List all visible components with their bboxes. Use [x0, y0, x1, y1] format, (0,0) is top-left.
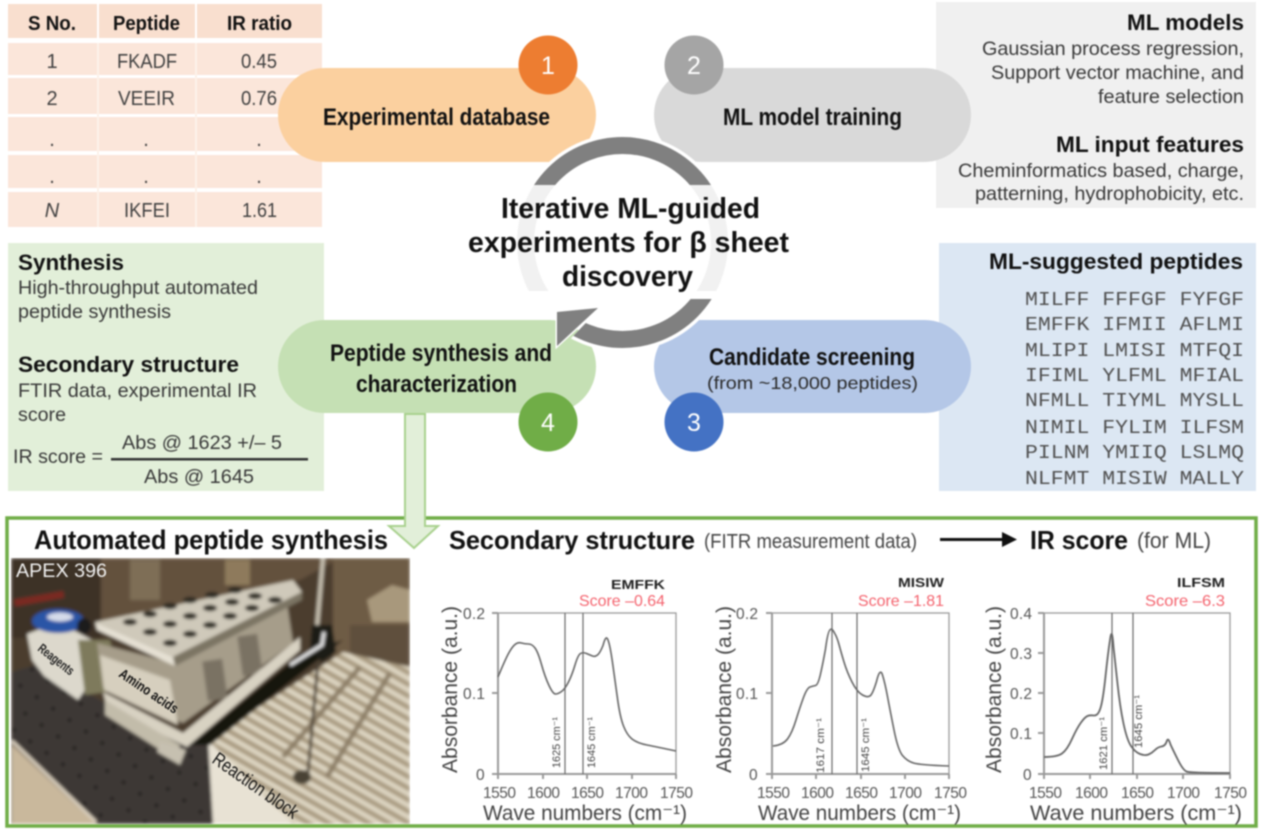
chart: ILFSM FTIR spectrum: Score –6.3 — [1145, 593, 1225, 610]
panel: ML models and input features: feature selection — [1098, 86, 1244, 108]
chart: EMFFK FTIR spectrum: Wave numbers (cm⁻¹) — [483, 802, 687, 825]
panel: experimental database table — [8, 4, 322, 227]
panel: ML models and input features: Cheminformatics based, charge, — [958, 160, 1244, 182]
arrow: down arrow into results frame — [389, 414, 438, 548]
title: central cycle heading: experiments for β sheet — [468, 227, 789, 259]
panel: experimental database table: 2 — [46, 88, 58, 110]
panel: ML-suggested peptides — [939, 243, 1256, 491]
panel: synthesis and secondary structure: Secondary structure — [18, 352, 239, 377]
panel: ML-suggested peptides: MILFF FFFGF FYFGF — [1025, 289, 1244, 311]
chart: EMFFK FTIR spectrum: 1650 — [571, 785, 604, 802]
pill: candidate screening — [654, 320, 971, 413]
panel: ML-suggested peptides: IFIML YLFML MFIAL — [1025, 365, 1244, 387]
chart: EMFFK FTIR spectrum: 0.2 — [463, 606, 485, 623]
panel: synthesis and secondary structure — [8, 243, 324, 491]
chart: ILFSM FTIR spectrum: 0.2 — [1010, 686, 1032, 703]
chart: ILFSM FTIR spectrum: Wave numbers (cm⁻¹) — [1030, 802, 1242, 825]
panel: experimental database table: 0.45 — [241, 51, 277, 73]
panel: experimental database table: S No. — [28, 13, 76, 35]
panel: synthesis and secondary structure: IR score = — [13, 446, 103, 468]
panel: synthesis and secondary structure: peptide synthesis — [18, 301, 171, 323]
chart: MISIW FTIR spectrum: 0.2 — [736, 606, 758, 623]
icon: step 1 badge — [518, 36, 578, 94]
chart: MISIW FTIR spectrum: Score –1.81 — [858, 593, 944, 610]
chart: MISIW FTIR spectrum: 0.1 — [736, 686, 758, 703]
pill: peptide synthesis and characterization: Peptide synthesis and — [330, 340, 552, 367]
photo: APEX 396 synthesizer: APEX 396 — [16, 561, 107, 582]
panel: ML-suggested peptides: NLFMT MISIW MALLY — [1025, 468, 1245, 490]
chart: EMFFK FTIR spectrum: 1625 cm⁻¹ — [551, 717, 563, 768]
chart: MISIW FTIR spectrum: 1617 cm⁻¹ — [815, 718, 827, 773]
chart: ILFSM FTIR spectrum: 1750 — [1214, 785, 1247, 802]
icon: step 2 badge — [664, 36, 724, 94]
heading: automated peptide synthesis: Automated peptide synthesis — [34, 525, 388, 555]
chart: ILFSM FTIR spectrum: 0.4 — [1010, 606, 1032, 623]
panel: experimental database table: 1.61 — [242, 200, 277, 222]
panel: experimental database table: . — [256, 166, 262, 188]
panel: ML models and input features: Gaussian process regression, — [982, 38, 1244, 60]
pill: experimental database — [278, 68, 596, 162]
arrow: to IR score — [940, 532, 1017, 547]
icon: step 3 badge: 3 — [687, 409, 701, 437]
chart: ILFSM FTIR spectrum: 1621 cm⁻¹ — [1098, 717, 1110, 770]
panel: experimental database table: . — [143, 166, 149, 188]
chart: EMFFK FTIR spectrum: 1750 — [660, 785, 693, 802]
chart: EMFFK FTIR spectrum — [439, 577, 693, 825]
panel: ML-suggested peptides: EMFFK IFMII AFLMI — [1025, 314, 1244, 336]
title: central cycle heading: Iterative ML-guided — [501, 193, 760, 225]
icon: step 3 badge — [664, 392, 724, 452]
chart: MISIW FTIR spectrum: 1550 — [757, 785, 790, 802]
chart: MISIW FTIR spectrum: Wave numbers (cm⁻¹) — [758, 802, 961, 825]
chart: ILFSM FTIR spectrum: 1645 cm⁻¹ — [1133, 695, 1145, 748]
panel: experimental database table: 1 — [46, 51, 58, 73]
panel: experimental database table: . — [49, 129, 55, 151]
chart: EMFFK FTIR spectrum: Absorbance (a.u.) — [439, 606, 462, 773]
panel: experimental database table: FKADF — [117, 51, 177, 73]
chart: ILFSM FTIR spectrum: ILFSM — [1177, 575, 1225, 590]
chart: ILFSM FTIR spectrum: 1700 — [1167, 785, 1200, 802]
chart: EMFFK FTIR spectrum: 0 — [476, 767, 485, 784]
panel: experimental database table: N — [45, 200, 60, 222]
pill: peptide synthesis and characterization — [278, 320, 596, 413]
panel: experimental database table: IR ratio — [227, 13, 292, 35]
panel: synthesis and secondary structure: Abs @ 1645 — [144, 466, 254, 488]
panel: ML models and input features: patterning, hydrophobicity, etc. — [975, 183, 1244, 205]
panel: ML-suggested peptides: NIMIL FYLIM ILFSM — [1025, 417, 1244, 439]
pill: candidate screening: Candidate screening — [709, 344, 915, 371]
chart: EMFFK FTIR spectrum: 1700 — [615, 785, 648, 802]
chart: ILFSM FTIR spectrum: 1550 — [1029, 785, 1062, 802]
icon: step 4 badge: 4 — [541, 409, 555, 437]
photo: APEX 396 synthesizer: Amino acids — [116, 665, 182, 717]
panel: synthesis and secondary structure: Synthesis — [18, 250, 124, 275]
panel: experimental database table: Peptide — [113, 13, 180, 35]
chart: ILFSM FTIR spectrum: 0 — [1023, 767, 1032, 784]
heading: secondary structure: Secondary structure — [449, 525, 695, 555]
heading: secondary structure: (FITR measurement data) — [704, 531, 917, 553]
pill: candidate screening: (from ~18,000 peptides) — [707, 373, 918, 393]
chart: ILFSM FTIR spectrum: 1600 — [1075, 785, 1108, 802]
panel: ML-suggested peptides: NFMLL TIYML MYSLL — [1025, 390, 1244, 412]
chart: ILFSM FTIR spectrum: 0.3 — [1010, 646, 1032, 663]
panel: experimental database table: VEEIR — [118, 88, 175, 110]
panel: ML models and input features: Support vector machine, and — [991, 62, 1244, 84]
chart: MISIW FTIR spectrum: 1700 — [889, 785, 922, 802]
chart: EMFFK FTIR spectrum: 1550 — [483, 785, 516, 802]
panel: synthesis and secondary structure: High-throughput automated — [18, 277, 258, 299]
title: central cycle heading — [468, 193, 789, 293]
chart: MISIW FTIR spectrum: 1600 — [801, 785, 834, 802]
panel: ML-suggested peptides: MLIPI LMISI MTFQI — [1025, 340, 1244, 362]
panel: synthesis and secondary structure: FTIR data, experimental IR — [18, 380, 257, 402]
chart: ILFSM FTIR spectrum: 0.1 — [1010, 726, 1032, 743]
pill: ML model training: ML model training — [723, 104, 902, 131]
chart: EMFFK FTIR spectrum: 1600 — [527, 785, 560, 802]
panel: experimental database table: IKFEI — [124, 200, 170, 222]
icon: step 4 badge — [518, 392, 578, 452]
heading: secondary structure — [449, 525, 917, 555]
panel: ML models and input features — [936, 2, 1256, 208]
panel: experimental database table: . — [49, 166, 55, 188]
title: central cycle heading: discovery — [562, 261, 693, 293]
pill: peptide synthesis and characterization: characterization — [356, 371, 517, 398]
panel: ML models and input features: ML models — [1127, 10, 1244, 35]
chart: MISIW FTIR spectrum: 0 — [749, 767, 758, 784]
chart: ILFSM FTIR spectrum: 1650 — [1121, 785, 1154, 802]
chart: EMFFK FTIR spectrum: EMFFK — [611, 577, 666, 592]
panel: experimental database table: . — [256, 129, 262, 151]
chart: ILFSM FTIR spectrum — [983, 575, 1247, 825]
icon: step 1 badge: 1 — [541, 52, 555, 80]
chart: MISIW FTIR spectrum: 1645 cm⁻¹ — [860, 718, 872, 772]
panel: synthesis and secondary structure: score — [18, 404, 66, 426]
panel: ML-suggested peptides: PILNM YMIIQ LSLMQ — [1025, 442, 1244, 464]
chart: MISIW FTIR spectrum: 1750 — [934, 785, 967, 802]
panel: experimental database table: 0.76 — [241, 88, 277, 110]
pill: experimental database: Experimental database — [323, 104, 550, 131]
chart: EMFFK FTIR spectrum: Score –0.64 — [579, 593, 665, 610]
panel: experimental database table: . — [143, 129, 149, 151]
photo: APEX 396 synthesizer — [11, 558, 410, 824]
panel: automated synthesis and FTIR results frame — [7, 518, 1256, 826]
chart: EMFFK FTIR spectrum: 1645 cm⁻¹ — [586, 717, 598, 768]
photo: APEX 396 synthesizer: Reagents — [35, 641, 77, 678]
pill: ML model training — [654, 68, 971, 162]
heading: IR score: (for ML) — [1137, 528, 1211, 553]
panel: ML models and input features: ML input features — [1056, 132, 1244, 157]
panel: synthesis and secondary structure: Abs @ 1623 +/– 5 — [122, 432, 282, 454]
heading: IR score: IR score — [1030, 525, 1128, 555]
chart: MISIW FTIR spectrum — [713, 575, 967, 825]
chart: MISIW FTIR spectrum: Absorbance (a.u.) — [713, 606, 736, 773]
chart: MISIW FTIR spectrum: MISIW — [898, 575, 945, 590]
heading: IR score — [1030, 525, 1211, 555]
chart: EMFFK FTIR spectrum: 0.1 — [463, 686, 485, 703]
chart: MISIW FTIR spectrum: 1650 — [845, 785, 878, 802]
icon: step 2 badge: 2 — [687, 52, 701, 80]
chart: ILFSM FTIR spectrum: Absorbance (a.u.) — [983, 606, 1006, 773]
arrow: circular iteration arrow — [526, 146, 720, 346]
panel: ML-suggested peptides: ML-suggested peptides — [989, 249, 1243, 274]
